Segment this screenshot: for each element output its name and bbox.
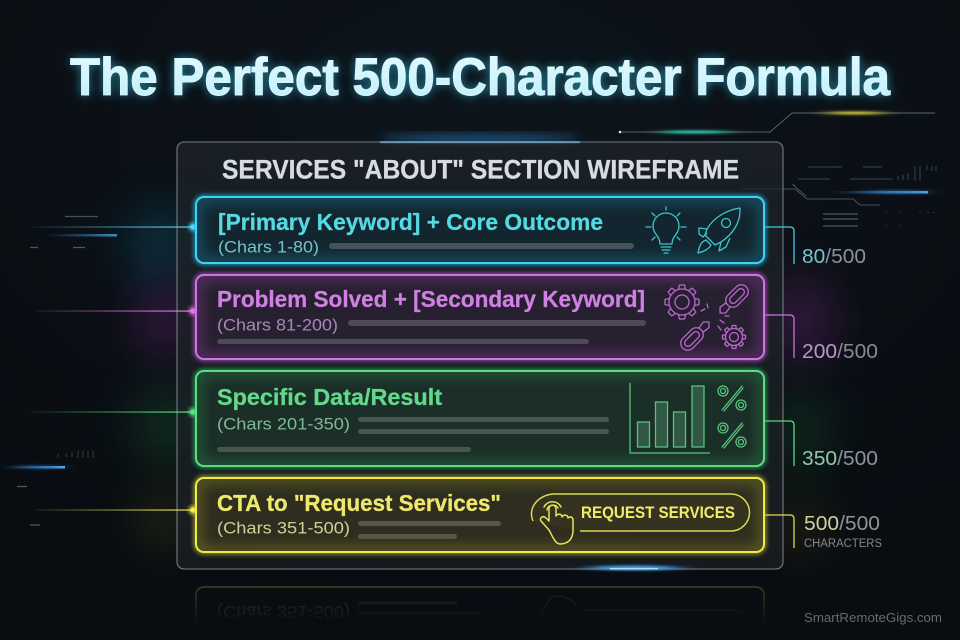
counter bracket: 500/500 characters: CHARACTERS <box>804 538 882 550</box>
left connector: section 4 <box>35 506 197 514</box>
icon: rocket <box>698 208 740 253</box>
section 3: specific data <box>30 371 764 466</box>
range: section 1: (Chars 1-80) <box>218 238 319 256</box>
reflection of lower panel <box>195 586 765 618</box>
title: The Perfect 500-Character Formula <box>70 48 890 107</box>
icon: pointing hand <box>540 502 573 544</box>
heading: section 2: Problem Solved + [Secondary Keyword] <box>217 286 645 312</box>
section 4: call to action <box>35 478 764 552</box>
counter bracket: 200/500: 200/500 <box>802 340 878 363</box>
range: section 2: (Chars 81-200) <box>217 316 338 334</box>
counter bracket: 500/500 characters <box>764 512 882 550</box>
reflection of lower panel: (Chars 351-500) <box>217 602 350 620</box>
panel top and bottom edge highlights <box>380 141 679 571</box>
counter bracket: 350/500 <box>764 421 878 470</box>
panel heading: SERVICES "ABOUT" SECTION WIREFRAME <box>222 154 739 184</box>
watermark: SmartRemoteGigs.com <box>804 610 942 625</box>
icon: percent signs <box>718 386 746 448</box>
range: section 4: (Chars 351-500) <box>217 520 350 538</box>
placeholder lines: section 4 <box>358 521 501 539</box>
icon: gears and broken chain <box>665 282 751 353</box>
placeholder lines: section 2 <box>217 320 646 344</box>
counter bracket: 200/500 <box>764 315 878 363</box>
button: request services <box>531 494 750 544</box>
decorative circuit lines, left <box>4 216 117 525</box>
placeholder lines: section 3 <box>217 417 609 452</box>
counter bracket: 500/500 characters: 500/500 <box>804 512 880 535</box>
left connector: section 2 <box>35 307 197 315</box>
button: request services: REQUEST SERVICES <box>581 503 735 522</box>
outer wireframe panel <box>177 142 783 569</box>
heading: section 1: [Primary Keyword] + Core Outcome <box>218 209 603 235</box>
range: section 3: (Chars 201-350) <box>217 416 350 434</box>
counter bracket: 80/500: 80/500 <box>802 245 866 268</box>
counter bracket: 80/500 <box>764 227 866 268</box>
decorative circuit lines, top right <box>619 112 936 226</box>
section 2: problem solved <box>35 275 764 359</box>
left connector: section 3 <box>30 408 197 416</box>
icon: bar chart <box>630 383 710 453</box>
heading: section 4: CTA to "Request Services" <box>217 490 501 516</box>
counter bracket: 350/500: 350/500 <box>802 447 878 470</box>
left connector: section 1 <box>30 223 197 231</box>
section 1: primary keyword <box>30 197 764 263</box>
ambient colour glows <box>130 135 830 555</box>
icon: light bulb <box>646 207 686 253</box>
heading: section 3: Specific Data/Result <box>217 384 442 410</box>
title: The Perfect 500-Character Formula <box>70 48 890 107</box>
placeholder line: section 1 <box>329 243 634 249</box>
